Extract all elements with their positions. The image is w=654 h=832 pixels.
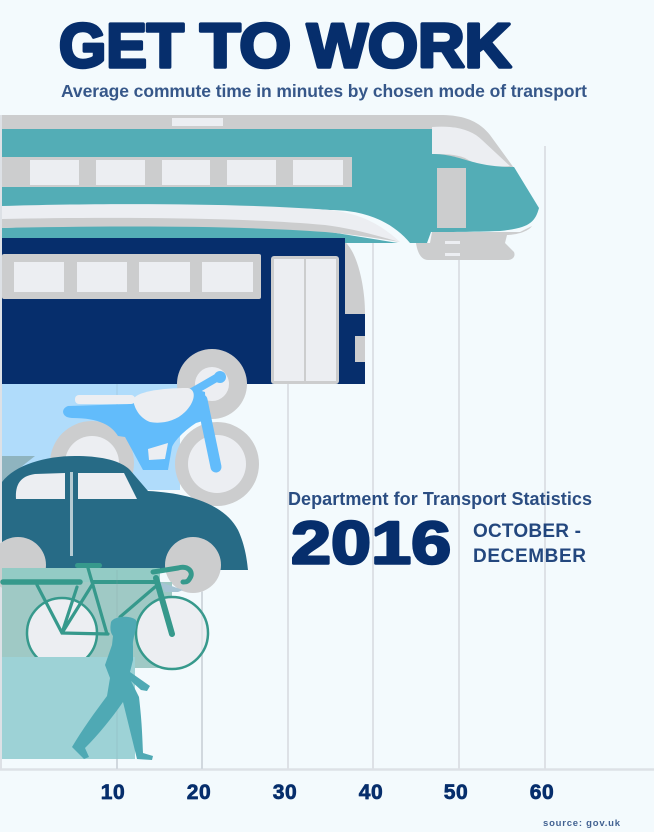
axis labels: 60 xyxy=(530,781,554,804)
bus wheel xyxy=(177,349,247,419)
axis labels xyxy=(101,781,554,804)
train window strip xyxy=(2,157,352,187)
bar: motorcycle xyxy=(2,384,180,490)
title: GET xyxy=(59,11,184,81)
bar: walking xyxy=(2,657,135,759)
axis labels: 40 xyxy=(359,781,383,804)
bus window strip xyxy=(2,254,261,299)
date range: DECEMBER xyxy=(473,546,586,567)
train door xyxy=(437,168,466,228)
department label: Department for Transport Statistics xyxy=(288,489,592,509)
source: source: gov.uk xyxy=(543,818,621,829)
car xyxy=(0,456,248,593)
date range xyxy=(473,521,586,567)
year: 2016 xyxy=(291,510,451,577)
axis labels: 20 xyxy=(187,781,211,804)
axis labels: 50 xyxy=(444,781,468,804)
title: WORK xyxy=(307,12,511,81)
bar: car xyxy=(2,456,35,482)
axis labels: 10 xyxy=(101,781,125,804)
bus door xyxy=(271,256,339,384)
title xyxy=(59,11,511,81)
motorcycle xyxy=(50,371,259,506)
walker xyxy=(72,617,153,760)
bicycle xyxy=(3,563,208,669)
train bogie xyxy=(416,226,532,260)
bar: bicycle xyxy=(2,568,183,668)
title: TO xyxy=(200,11,291,81)
date range: OCTOBER - xyxy=(473,521,581,542)
axis labels: 30 xyxy=(273,781,297,804)
subtitle: Average commute time in minutes by chosen mode of transport xyxy=(61,81,587,101)
bus xyxy=(2,233,365,419)
train xyxy=(2,115,539,260)
